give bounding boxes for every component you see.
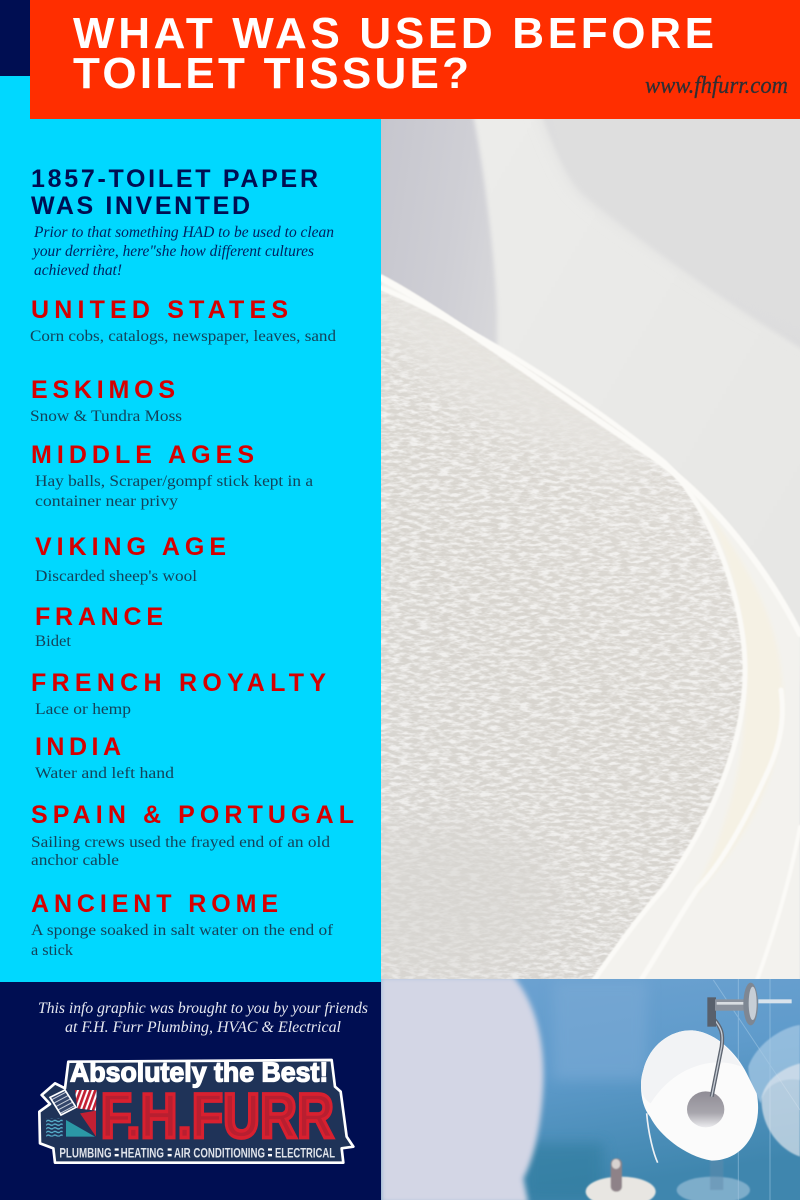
- photo: toilet roll on holder: [380, 977, 800, 1200]
- entry: Ancient Rome: [31, 890, 334, 959]
- company logo: [39, 1057, 353, 1163]
- entry: Middle Ages: Hay balls, Scraper/gompf stick kept in a: [35, 473, 313, 490]
- company logo: PLUMBING: [59, 1144, 112, 1160]
- intro text: your derrière, here"she how different cultures: [31, 243, 314, 260]
- entry: Spain and Portugal: Sailing crews used the frayed end of an old: [31, 834, 330, 851]
- entry: United States: [30, 296, 336, 345]
- scalloped paper edges: [381, 278, 800, 980]
- tile reflections: [713, 977, 800, 1200]
- blurred fixture: [586, 1158, 750, 1200]
- website address: www.fhfurr.com: [645, 73, 788, 99]
- entry: France: FRANCE: [35, 603, 163, 631]
- entry: India: INDIA: [35, 733, 121, 761]
- footer credit text: at F.H. Furr Plumbing, HVAC & Electrical: [65, 1019, 341, 1036]
- company logo: Absolutely the Best!: [70, 1057, 328, 1088]
- entry: Ancient Rome: A sponge soaked in salt water on the end of: [31, 922, 334, 939]
- entry: Middle Ages: MIDDLE AGES: [31, 441, 254, 469]
- blurred toilet tank: [380, 977, 543, 1200]
- cyan side panel background: [0, 0, 381, 982]
- title: WHAT WAS USED BEFORE: [73, 9, 714, 58]
- entry: Viking Age: Discarded sheep's wool: [35, 568, 197, 585]
- logo icon: [46, 1090, 97, 1137]
- intro text: Prior to that something HAD to be used to clean: [33, 224, 334, 241]
- entry: French Royalty: Lace or hemp: [35, 701, 131, 718]
- entry: French Royalty: [31, 669, 326, 718]
- company logo: ELECTRICAL: [275, 1144, 335, 1160]
- company logo: HEATING: [121, 1144, 164, 1160]
- entry: United States: Corn cobs, catalogs, newspaper, leaves, sand: [30, 328, 336, 345]
- cream inner fold: [707, 532, 780, 872]
- entry: Ancient Rome: a stick: [31, 942, 73, 959]
- entry: United States: UNITED STATES: [31, 296, 288, 324]
- title: TOILET TISSUE?: [73, 49, 469, 98]
- entry: Spain and Portugal: [31, 801, 354, 869]
- entry: India: Water and left hand: [35, 765, 174, 782]
- intro heading: 1857-TOILET PAPER: [31, 165, 318, 193]
- blue tile wall: [380, 977, 800, 1200]
- navy corner block: [0, 0, 30, 76]
- textured roll face: [381, 291, 743, 979]
- footer panel: [0, 982, 381, 1200]
- company logo: AIR CONDITIONING: [174, 1144, 265, 1160]
- entry: Viking Age: [35, 533, 226, 585]
- chrome holder: [707, 983, 792, 1097]
- photo: paper towel roll close-up: [381, 119, 800, 979]
- entry: India: [35, 733, 174, 782]
- second roll in the background: [472, 119, 800, 626]
- entry: Viking Age: VIKING AGE: [35, 533, 226, 561]
- entry: France: Bidet: [35, 633, 72, 650]
- entry: Spain and Portugal: anchor cable: [31, 852, 119, 869]
- intro text: achieved that!: [34, 262, 122, 279]
- entry: Middle Ages: container near privy: [35, 493, 178, 510]
- company logo: F.H.FURR: [101, 1082, 334, 1152]
- entry: Middle Ages: [31, 441, 313, 510]
- title banner: [30, 0, 800, 119]
- main roll outer layers: [381, 274, 800, 980]
- entry: Spain and Portugal: SPAIN & PORTUGAL: [31, 801, 354, 829]
- toilet roll: [641, 1030, 758, 1163]
- intro heading: WAS INVENTED: [31, 192, 250, 220]
- entry: Eskimos: ESKIMOS: [31, 376, 175, 404]
- entry: Ancient Rome: ANCIENT ROME: [31, 890, 278, 918]
- entry: Eskimos: Snow & Tundra Moss: [30, 408, 182, 425]
- entry: France: [35, 603, 163, 650]
- footer credit text: This info graphic was brought to you by your friends: [38, 1000, 368, 1017]
- entry: Eskimos: [30, 376, 182, 425]
- entry: French Royalty: FRENCH ROYALTY: [31, 669, 326, 697]
